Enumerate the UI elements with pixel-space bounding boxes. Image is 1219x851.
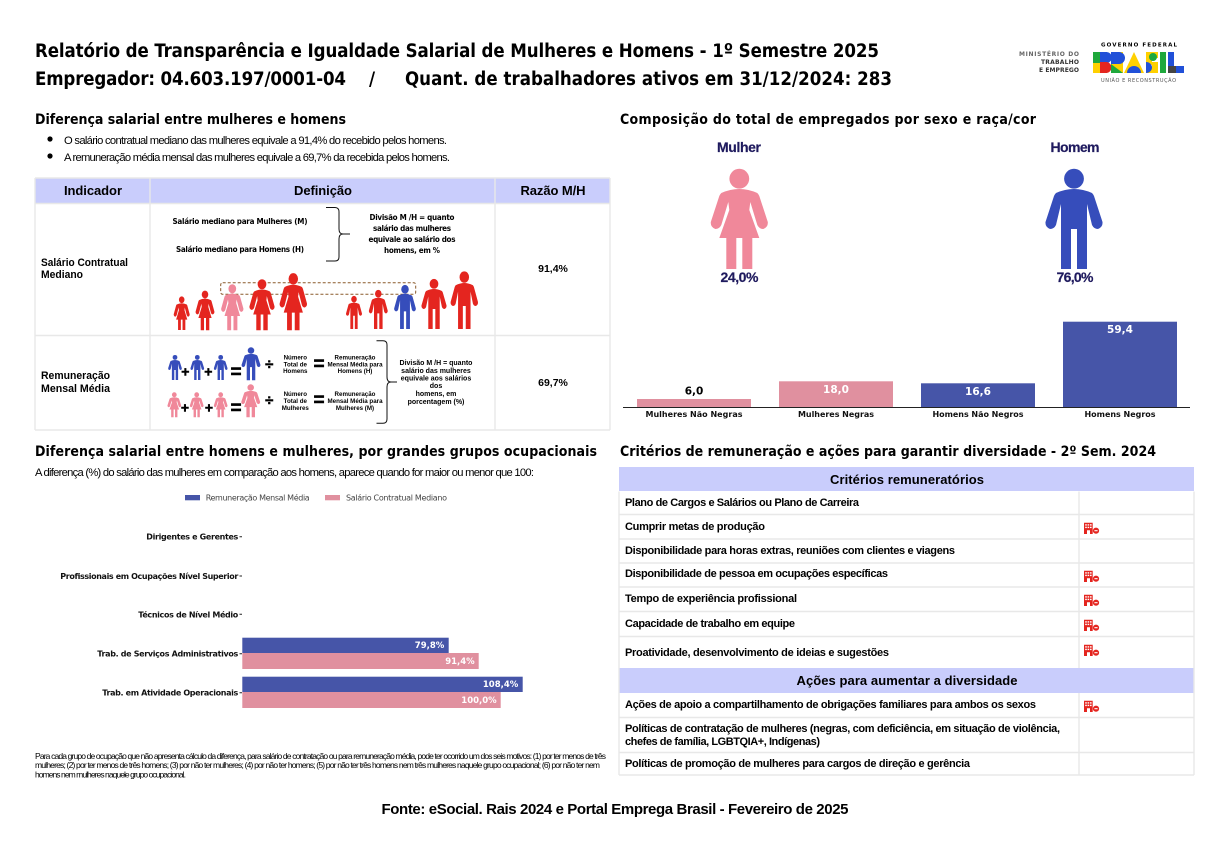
- title: [35, 41, 892, 90]
- row: remuneração mensal média: ÷: [265, 356, 273, 373]
- heading: grupos ocupacionais: Diferença salarial entre homens e mulheres, por grandes grupos ocupacionais: [35, 444, 597, 460]
- footnote: [35, 751, 606, 780]
- row: salário contratual mediano: homens, em %: [384, 246, 440, 255]
- bullet list: A remuneração média mensal das mulheres equivale a 69,7% da recebida pelos homens.: [64, 152, 450, 164]
- row: remuneração mensal média: Total de: [284, 362, 307, 368]
- title: /: [369, 69, 376, 90]
- row: remuneração mensal média: Mulheres (M): [336, 405, 374, 412]
- table: critérios e ações: Proatividade, desenvolvimento de ideias e sugestões: [625, 647, 889, 659]
- title: Empregador: 04.603.197/0001-04: [35, 69, 346, 90]
- bar chart: sexo e raça/cor: 59,4: [1107, 324, 1133, 336]
- table: critérios e ações: Plano de Cargos e Salários ou Plano de Carreira: [625, 497, 860, 509]
- icon: mulher 24,0%: 24,0%: [720, 269, 759, 285]
- heading: composição: Composição do total de empregados por sexo e raça/cor: [620, 112, 1037, 128]
- bar chart: horizontal: 100,0%: [461, 696, 497, 706]
- legend: [185, 492, 447, 502]
- row: remuneração mensal média: 69,7%: [538, 377, 569, 389]
- heading: critérios: Critérios de remuneração e ações para garantir diversidade - 2º Sem. 2024: [620, 444, 1156, 460]
- footnote: Para cada grupo de ocupação que não apresenta cálculo da diferença, para salário de contratação ou para remuneração média, pode ter ocorrido um dos seis motivos: (1) por ter menos de três: [35, 751, 606, 761]
- bar chart: sexo e raça/cor: 6,0: [685, 386, 703, 398]
- bar chart: horizontal: 108,4%: [483, 680, 519, 690]
- row: remuneração mensal média: dos: [430, 383, 442, 390]
- row: salário contratual mediano: salário das mulheres: [373, 224, 451, 233]
- table: critérios e ações: [619, 467, 1194, 775]
- row: remuneração mensal média: =: [313, 354, 325, 375]
- table: indicadores: Indicador: [64, 183, 122, 198]
- panel: diferença salarial: [35, 112, 610, 430]
- row: remuneração mensal média: Mulheres: [282, 405, 309, 412]
- row: remuneração mensal média: Mensal Média para: [327, 362, 383, 368]
- row: remuneração mensal média: =: [230, 362, 242, 383]
- table: critérios e ações: chefes de família, LGBTQIA+, Indígenas): [625, 736, 820, 748]
- row: salário contratual mediano: Salário mediano para Mulheres (M): [172, 217, 308, 226]
- logo: ministério e governo federal: TRABALHO: [1041, 59, 1079, 66]
- row: remuneração mensal média: Homens (H): [338, 368, 372, 375]
- bar chart: horizontal: Trab. em Atividade Operacionais: [102, 689, 239, 698]
- bar chart: sexo e raça/cor: 18,0: [823, 384, 849, 396]
- bar chart: horizontal: [60, 532, 523, 708]
- logo: ministério e governo federal: [1019, 42, 1184, 84]
- bar chart: sexo e raça/cor: [623, 322, 1190, 419]
- bullet list: O salário contratual mediano das mulheres equivale a 91,4% do recebido pelos homens.: [64, 135, 447, 147]
- row: remuneração mensal média: homens, em: [416, 391, 456, 398]
- icon: homem 76,0%: 76,0%: [1056, 269, 1094, 285]
- logo: ministério e governo federal: E EMPREGO: [1039, 67, 1079, 74]
- row: remuneração mensal média: [41, 341, 569, 423]
- row: remuneração mensal média: equivale aos salários: [401, 376, 471, 382]
- text: explicação: A diferença (%) do salário das mulheres em comparação aos homens, aparece quando for maior ou menor que 100:: [35, 467, 534, 479]
- row: remuneração mensal média: +: [181, 364, 189, 380]
- title: Relatório de Transparência e Igualdade Salarial de Mulheres e Homens - 1º Semestre 2025: [35, 41, 879, 62]
- row: remuneração mensal média: Homens: [283, 368, 308, 375]
- bar chart: sexo e raça/cor: Homens Negros: [1084, 410, 1156, 419]
- table: critérios e ações: Disponibilidade de pessoa em ocupações específicas: [625, 568, 888, 580]
- bar chart: sexo e raça/cor: Mulheres Negras: [798, 410, 874, 419]
- bar chart: horizontal: 79,8%: [415, 641, 445, 651]
- row: remuneração mensal média: Número: [284, 391, 307, 398]
- icon: mulher 24,0%: [711, 139, 768, 285]
- heading: diferença salarial: Diferença salarial entre mulheres e homens: [35, 112, 346, 128]
- panel: composição: [620, 112, 1190, 419]
- table: indicadores: [35, 178, 610, 430]
- bullet list: [47, 135, 450, 164]
- bar chart: sexo e raça/cor: Mulheres Não Negras: [646, 410, 743, 419]
- table: critérios e ações: Cumprir metas de produção: [625, 521, 765, 533]
- icons: critério presente: [1084, 523, 1099, 712]
- row: salário contratual mediano: [41, 208, 569, 330]
- logo: ministério e governo federal: UNIÃO E RECONSTRUÇÃO: [1101, 77, 1176, 84]
- legend: Salário Contratual Mediano: [346, 494, 447, 502]
- row: salário contratual mediano: equivale ao salário dos: [368, 235, 456, 244]
- table: indicadores: Razão M/H: [520, 183, 586, 198]
- table: critérios e ações: Critérios remuneratórios: [830, 472, 984, 487]
- row: remuneração mensal média: Mensal Média para: [327, 398, 383, 405]
- legend: Remuneração Mensal Média: [206, 492, 310, 502]
- table: critérios e ações: Ações de apoio a compartilhamento de obrigações familiares para ambos os sexos: [625, 699, 1036, 711]
- row: remuneração mensal média: porcentagem (%): [408, 399, 464, 406]
- icon: homem 76,0%: Homem: [1050, 139, 1100, 155]
- table: critérios e ações: Ações para aumentar a diversidade: [796, 673, 1018, 688]
- row: salário contratual mediano: 91,4%: [538, 263, 569, 275]
- row: remuneração mensal média: ÷: [265, 392, 273, 409]
- logo: ministério e governo federal: GOVERNO FEDERAL: [1101, 42, 1177, 48]
- source note: Fonte: eSocial. Rais 2024 e Portal Emprega Brasil - Fevereiro de 2025: [382, 801, 848, 818]
- title: Quant. de trabalhadores ativos em 31/12/2024: 283: [405, 69, 892, 90]
- row: remuneração mensal média: +: [181, 400, 189, 416]
- row: remuneração mensal média: +: [204, 364, 212, 380]
- table: critérios e ações: Tempo de experiência profissional: [625, 593, 797, 605]
- row: remuneração mensal média: Remuneração: [335, 391, 376, 398]
- pictogram: women and men by salary: [174, 271, 478, 330]
- table: critérios e ações: Políticas de promoção de mulheres para cargos de direção e gerência: [625, 758, 971, 770]
- table: critérios e ações: Capacidade de trabalho em equipe: [625, 618, 795, 630]
- row: remuneração mensal média: Divisão M /H = quanto: [400, 360, 472, 367]
- table: indicadores: Definição: [294, 183, 352, 198]
- row: salário contratual mediano: Salário mediano para Homens (H): [176, 245, 304, 254]
- row: remuneração mensal média: +: [205, 400, 213, 416]
- bar chart: horizontal: 91,4%: [445, 657, 475, 667]
- bar chart: horizontal: Dirigentes e Gerentes: [146, 532, 239, 542]
- row: salário contratual mediano: Salário Contratual: [41, 257, 128, 269]
- footnote: homens nem mulheres naquele grupo ocupacional.: [35, 770, 186, 780]
- footnote: mulheres; (2) por ter menos de três homens; (3) por não ter mulheres; (4) por não ter homens; (5) por não ter três homens nem três mulheres naquele grupo ocupacional; (6) por não ter nem: [35, 760, 600, 770]
- row: remuneração mensal média: salário das mulheres: [401, 368, 471, 375]
- row: remuneração mensal média: =: [230, 398, 242, 419]
- bar chart: horizontal: Profissionais em Ocupações Nível Superior: [60, 572, 238, 581]
- bar chart: sexo e raça/cor: Homens Não Negros: [932, 410, 1024, 419]
- row: salário contratual mediano: Divisão M /H = quanto: [370, 213, 455, 222]
- bar chart: sexo e raça/cor: 16,6: [965, 386, 991, 398]
- row: remuneração mensal média: Número: [284, 354, 307, 362]
- bar chart: horizontal: Trab. de Serviços Administrativos: [97, 650, 239, 659]
- row: salário contratual mediano: Mediano: [41, 269, 83, 281]
- panel: grupos ocupacionais: [35, 444, 606, 780]
- panel: critérios de remuneração: [619, 444, 1194, 775]
- row: remuneração mensal média: Total de: [284, 398, 307, 405]
- icon: homem 76,0%: [1045, 139, 1103, 285]
- logo: ministério e governo federal: MINISTÉRIO DO: [1019, 50, 1079, 58]
- table: critérios e ações: Disponibilidade para horas extras, reuniões com clientes e viagens: [625, 545, 955, 557]
- icon: mulher 24,0%: Mulher: [717, 139, 762, 155]
- row: remuneração mensal média: =: [313, 390, 325, 411]
- bar chart: horizontal: Técnicos de Nível Médio: [138, 609, 239, 619]
- table: critérios e ações: Políticas de contratação de mulheres (negras, com deficiência, em situação de violência,: [625, 723, 1060, 735]
- row: remuneração mensal média: Mensal Média: [41, 383, 111, 395]
- row: remuneração mensal média: Remuneração: [335, 354, 376, 362]
- row: remuneração mensal média: Remuneração: [41, 370, 110, 382]
